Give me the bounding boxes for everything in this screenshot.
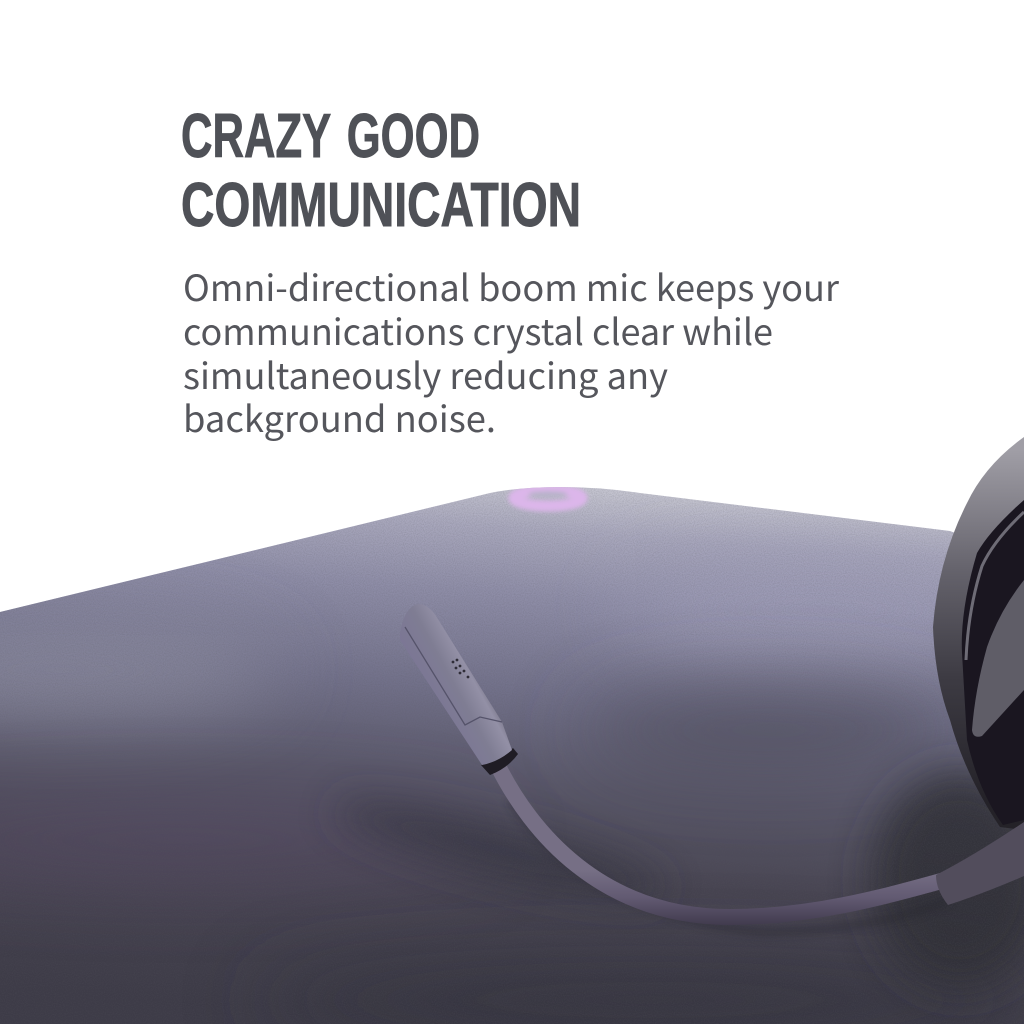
title — [181, 102, 581, 240]
flexible boom tube — [498, 766, 945, 917]
description text: background noise. — [183, 391, 496, 443]
boom shadow — [510, 800, 950, 932]
photo: headset ear cup — [933, 437, 1024, 830]
mic capsule collar — [481, 748, 518, 775]
description text: Omni-directional boom mic keeps your — [183, 260, 840, 312]
mic holes — [452, 659, 469, 678]
description text: communications crystal clear while — [183, 304, 773, 356]
headset slat — [972, 580, 1024, 737]
description text — [183, 260, 840, 443]
headset inner shell — [962, 500, 1024, 825]
photo: microphone boom — [400, 604, 1024, 932]
logo glow on pad — [514, 490, 582, 506]
title: COMMUNICATION — [181, 171, 581, 240]
mic capsule body — [400, 604, 512, 765]
boom end connector — [936, 822, 1024, 905]
fabric texture — [0, 488, 992, 964]
ear cushion — [933, 437, 1024, 830]
photo: mouse pad surface — [0, 480, 1024, 1024]
title: CRAZY GOOD — [181, 102, 480, 171]
description text: simultaneously reducing any — [183, 348, 668, 400]
